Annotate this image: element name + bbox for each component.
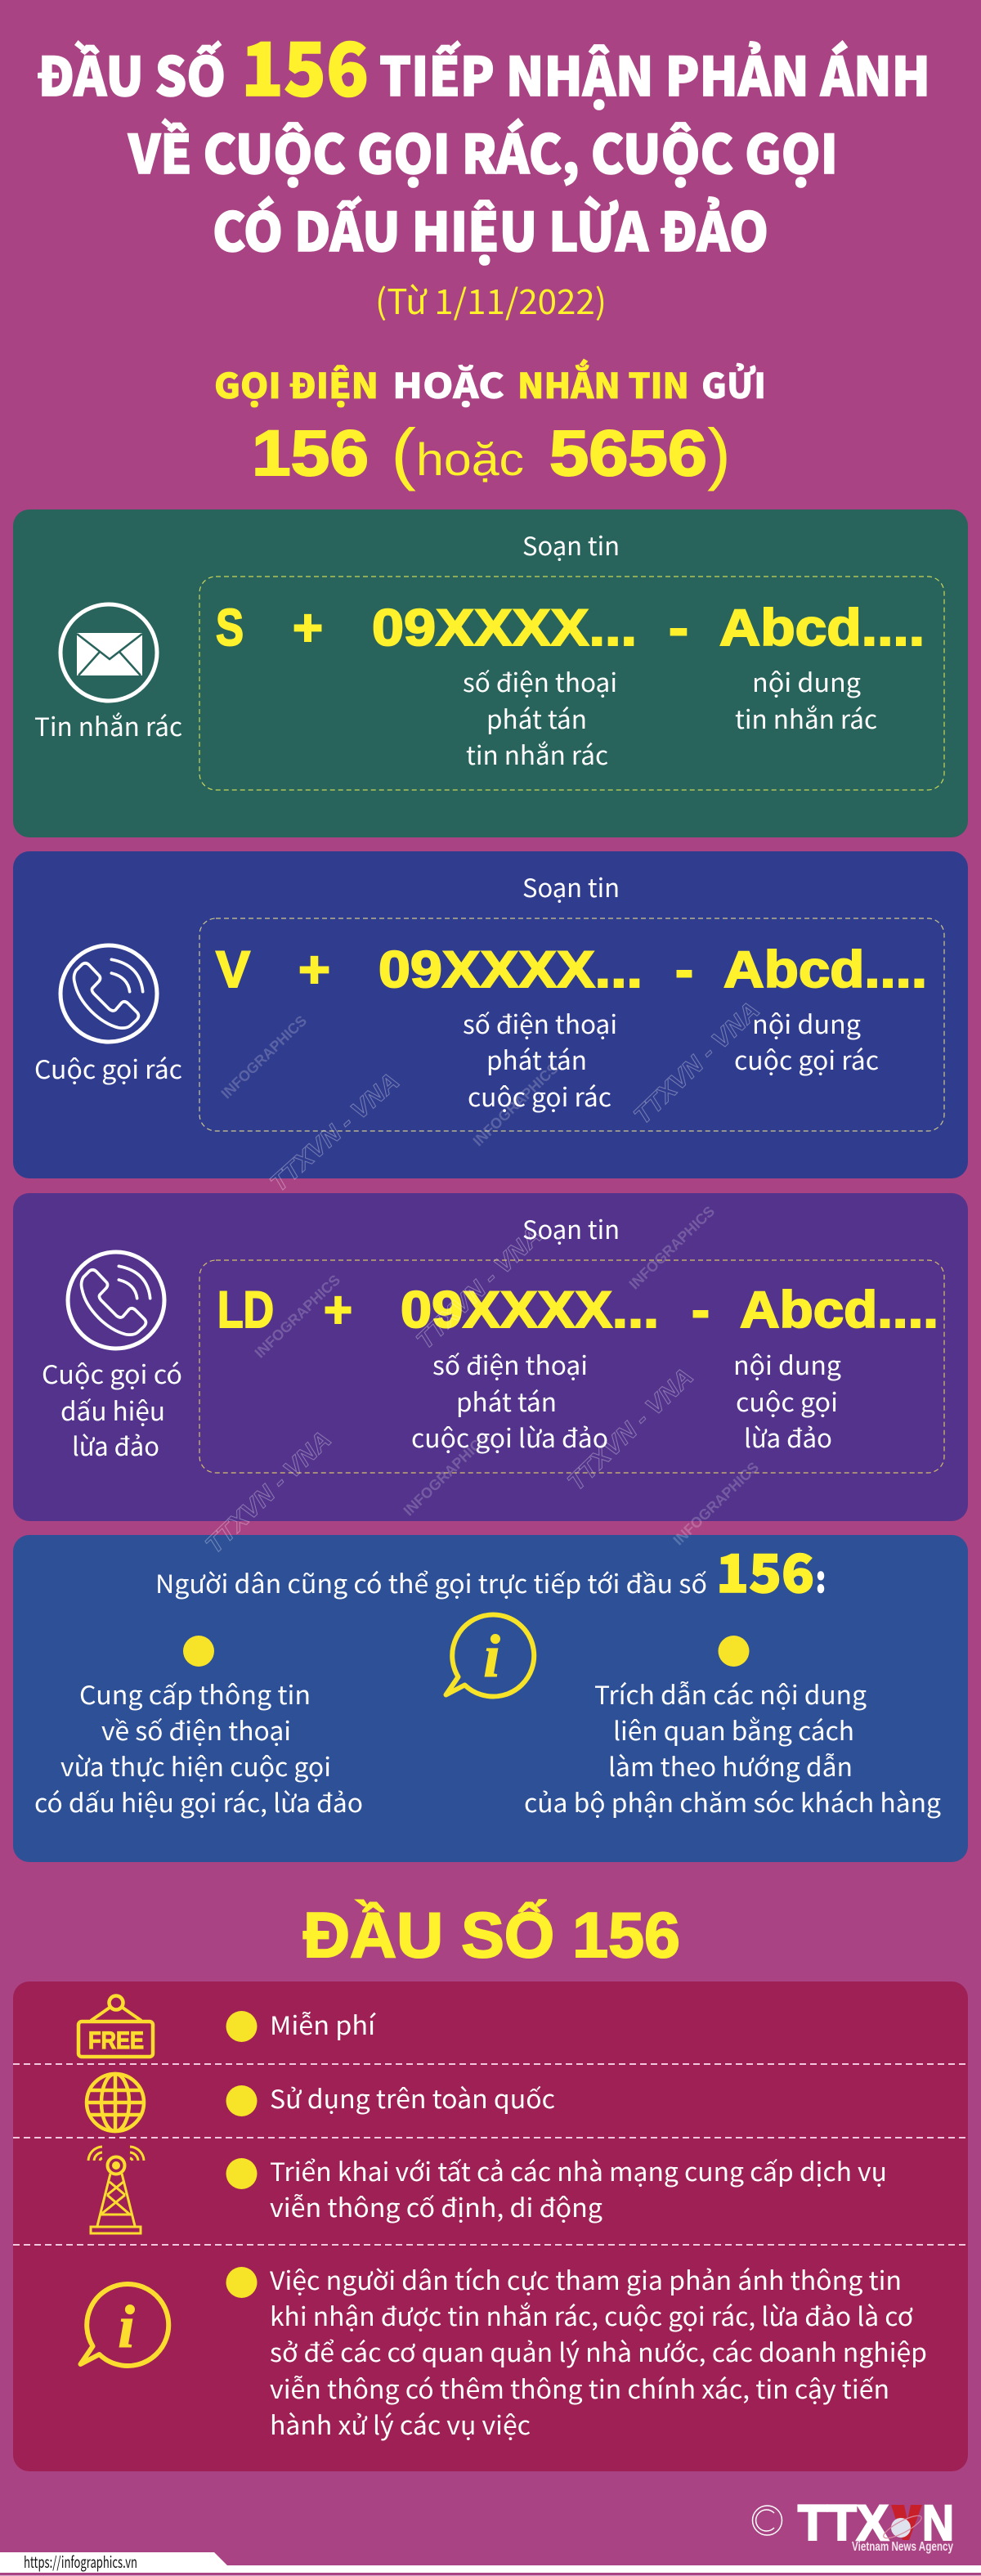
caption: phone number (463, 662, 617, 772)
compose label: Soạn tin (522, 1209, 620, 1246)
compose label: Soạn tin (522, 526, 620, 563)
caption: phone number: phát tán (456, 1382, 557, 1419)
icon: info bubble (446, 1615, 534, 1697)
label: suspected scam calls: Cuộc gọi có (42, 1354, 182, 1391)
text: participation paragraph: khi nhận được tin nhắn rác, cuộc gọi rác, lừa đảo là cơ (270, 2296, 913, 2333)
caption: content: cuộc gọi rác (734, 1040, 879, 1077)
text: quote content: liên quan bằng cách (613, 1711, 854, 1748)
caption: phone number: tin nhắn rác (466, 735, 608, 772)
text: participation paragraph: hành xử lý các vụ việc (270, 2405, 531, 2442)
syntax formula: 09XXXX... (379, 941, 643, 999)
title: ĐẦU SỐ (37, 34, 226, 111)
label: spam messages: Tin nhắn rác (34, 707, 182, 743)
caption: content: cuộc gọi (736, 1382, 838, 1419)
dashed syntax box (199, 918, 944, 1131)
watermark: agency marks: INFOGRAPHICS (218, 1012, 310, 1102)
caption: phone number: cuộc gọi rác (468, 1077, 611, 1114)
title: CÓ DẤU HIỆU LỪA ĐẢO (213, 190, 768, 267)
caption: content (733, 1345, 842, 1455)
title: 156 (241, 11, 369, 117)
call or text heading: HOẶC (392, 359, 504, 409)
caption: content: lừa đảo (744, 1418, 832, 1455)
syntax formula: - (692, 1281, 710, 1339)
syntax formula: V (216, 941, 250, 999)
watermark: agency marks: INFOGRAPHICS (670, 1459, 762, 1548)
text: participation paragraph: sở để các cơ quan quản lý nhà nước, các doanh nghiệp (270, 2332, 927, 2369)
watermark: agency marks: INFOGRAPHICS (626, 1203, 718, 1292)
title: VỀ CUỘC GỌI RÁC, CUỘC GỌI (128, 112, 838, 189)
text: provide information (34, 1675, 363, 1820)
label: spam calls: Cuộc gọi rác (34, 1049, 182, 1086)
label: suspected scam calls: dấu hiệu (60, 1391, 165, 1428)
call or text heading (214, 359, 766, 409)
bullet: participation (226, 2267, 257, 2298)
syntax formula: 09XXXX... (372, 599, 637, 657)
icon: copyright (752, 2506, 782, 2535)
caption: phone number: số điện thoại (432, 1345, 588, 1382)
icon: free sign (78, 1995, 153, 2057)
text: provide information: có dấu hiệu gọi rác, lừa đảo (34, 1783, 363, 1820)
syntax formula: LD (217, 1281, 274, 1339)
syntax formula: Abcd.... (723, 941, 927, 999)
caption: content (734, 1004, 879, 1077)
logo: TTXVN (798, 2495, 954, 2554)
icon: info bubble: i (118, 2294, 135, 2361)
caption: content: tin nhắn rác (735, 699, 877, 736)
syntax formula: Abcd.... (719, 599, 925, 657)
text: provide information: vừa thực hiện cuộc gọi (60, 1747, 331, 1784)
title: TIẾP NHẬN PHẢN ÁNH (379, 34, 930, 111)
text: nationwide use: Sử dụng trên toàn quốc (270, 2079, 555, 2116)
logo: TTXVN: TTX (798, 2495, 889, 2551)
syntax formula (216, 599, 925, 657)
caption: phone number (463, 1004, 617, 1114)
text: all carriers (270, 2152, 887, 2224)
caption: phone number: phát tán (486, 1040, 587, 1077)
text: quote content: của bộ phận chăm sóc khách hàng (524, 1783, 942, 1820)
icon: envelope (60, 604, 157, 701)
logo: TTXVN: N (922, 2495, 954, 2551)
syntax formula (217, 1281, 938, 1339)
caption: phone number: phát tán (486, 699, 587, 736)
numbers 156 or 5656: ) (707, 415, 731, 491)
syntax formula: + (293, 599, 323, 657)
syntax formula: Abcd.... (740, 1281, 938, 1339)
numbers 156 or 5656: ( (391, 415, 416, 491)
panel heading: 156 (716, 1533, 814, 1608)
bullet: free (226, 2011, 257, 2042)
bullet: left (183, 1636, 214, 1667)
caption: content: nội dung (752, 1004, 862, 1041)
bullet: right (718, 1636, 749, 1667)
footer url: https://infographics.vn (24, 2551, 137, 2573)
panel: hotline features (13, 1981, 968, 2471)
text: quote content (524, 1675, 942, 1820)
icon: free sign: FREE (88, 2027, 144, 2054)
bullet: all carriers (226, 2158, 257, 2189)
caption: content: nội dung (752, 662, 862, 699)
syntax formula: - (669, 599, 688, 657)
icon: globe (87, 2074, 144, 2131)
call or text heading: GỬI (701, 359, 766, 409)
syntax formula (216, 941, 927, 999)
text: provide information: về số điện thoại (101, 1711, 291, 1748)
watermark: agency marks (200, 997, 765, 1560)
syntax formula: - (675, 941, 693, 999)
numbers 156 or 5656: 5656 (549, 416, 707, 489)
heading: 156 hotline: ĐẦU SỐ 156 (303, 1899, 680, 1971)
watermark: agency marks: INFOGRAPHICS (401, 1429, 492, 1519)
icon: phone (60, 945, 157, 1042)
panel heading (155, 1533, 826, 1608)
caption: phone number: cuộc gọi lừa đảo (411, 1418, 608, 1455)
syntax formula: S (216, 599, 244, 657)
panel: spam calls (13, 851, 968, 1178)
panel heading: Người dân cũng có thể gọi trực tiếp tới đầu số (155, 1564, 707, 1600)
numbers 156 or 5656 (252, 415, 731, 491)
text: quote content: làm theo hướng dẫn (608, 1747, 853, 1784)
panel: scam calls (13, 1193, 968, 1521)
text: participation paragraph: viễn thông có thêm thông tin chính xác, tin cậy tiến (270, 2369, 889, 2406)
icon: info bubble (80, 2284, 168, 2366)
text: provide information: Cung cấp thông tin (79, 1675, 311, 1712)
bullet: nationwide (226, 2085, 257, 2116)
caption: content (735, 662, 877, 736)
syntax formula: + (324, 1281, 352, 1339)
text: quote content: Trích dẫn các nội dung (594, 1675, 867, 1712)
footer bar (0, 2551, 981, 2576)
call or text heading: GỌI ĐIỆN (214, 359, 379, 409)
dashed syntax box (199, 1260, 944, 1473)
text: free of charge: Miễn phí (270, 2005, 377, 2042)
text: all carriers: Triển khai với tất cả các nhà mạng cung cấp dịch vụ (270, 2152, 887, 2188)
text: participation paragraph (270, 2260, 927, 2442)
watermark: agency marks: TTXVN - VNA (411, 1222, 548, 1355)
dashed syntax box (199, 577, 944, 790)
watermark: agency marks: INFOGRAPHICS (252, 1272, 343, 1361)
syntax formula: + (298, 941, 330, 999)
text: all carriers: viễn thông cố định, di động (270, 2188, 603, 2224)
numbers 156 or 5656: 156 (252, 416, 369, 489)
label: suspected scam calls: lừa đảo (72, 1426, 159, 1463)
caption: phone number: số điện thoại (463, 1004, 617, 1041)
watermark: agency marks: TTXVN - VNA (200, 1426, 337, 1560)
syntax formula: 09XXXX... (401, 1281, 659, 1339)
icon: signal tower (88, 2147, 144, 2233)
caption: phone number (411, 1345, 608, 1455)
panel: direct call to 156 (13, 1533, 968, 1862)
icon: phone (68, 1252, 164, 1349)
date subtitle: (Từ 1/11/2022) (375, 275, 607, 325)
caption: phone number: số điện thoại (463, 662, 617, 699)
call or text heading: NHẮN TIN (517, 359, 689, 409)
icon: info bubble: i (483, 1623, 500, 1690)
panel heading: : (816, 1551, 826, 1603)
label: suspected scam calls (42, 1354, 182, 1463)
watermark: agency marks: TTXVN - VNA (562, 1363, 699, 1497)
text: participation paragraph: Việc người dân tích cực tham gia phản ánh thông tin (270, 2260, 902, 2297)
watermark: agency marks: TTXVN - VNA (265, 1068, 405, 1197)
panel: spam text messages (13, 509, 968, 837)
watermark: agency marks: INFOGRAPHICS (470, 1060, 562, 1149)
numbers 156 or 5656: hoặc (416, 433, 524, 485)
title (37, 11, 930, 267)
watermark: agency marks: TTXVN - VNA (629, 997, 765, 1130)
compose label: Soạn tin (522, 868, 620, 904)
caption: content: nội dung (733, 1345, 842, 1382)
